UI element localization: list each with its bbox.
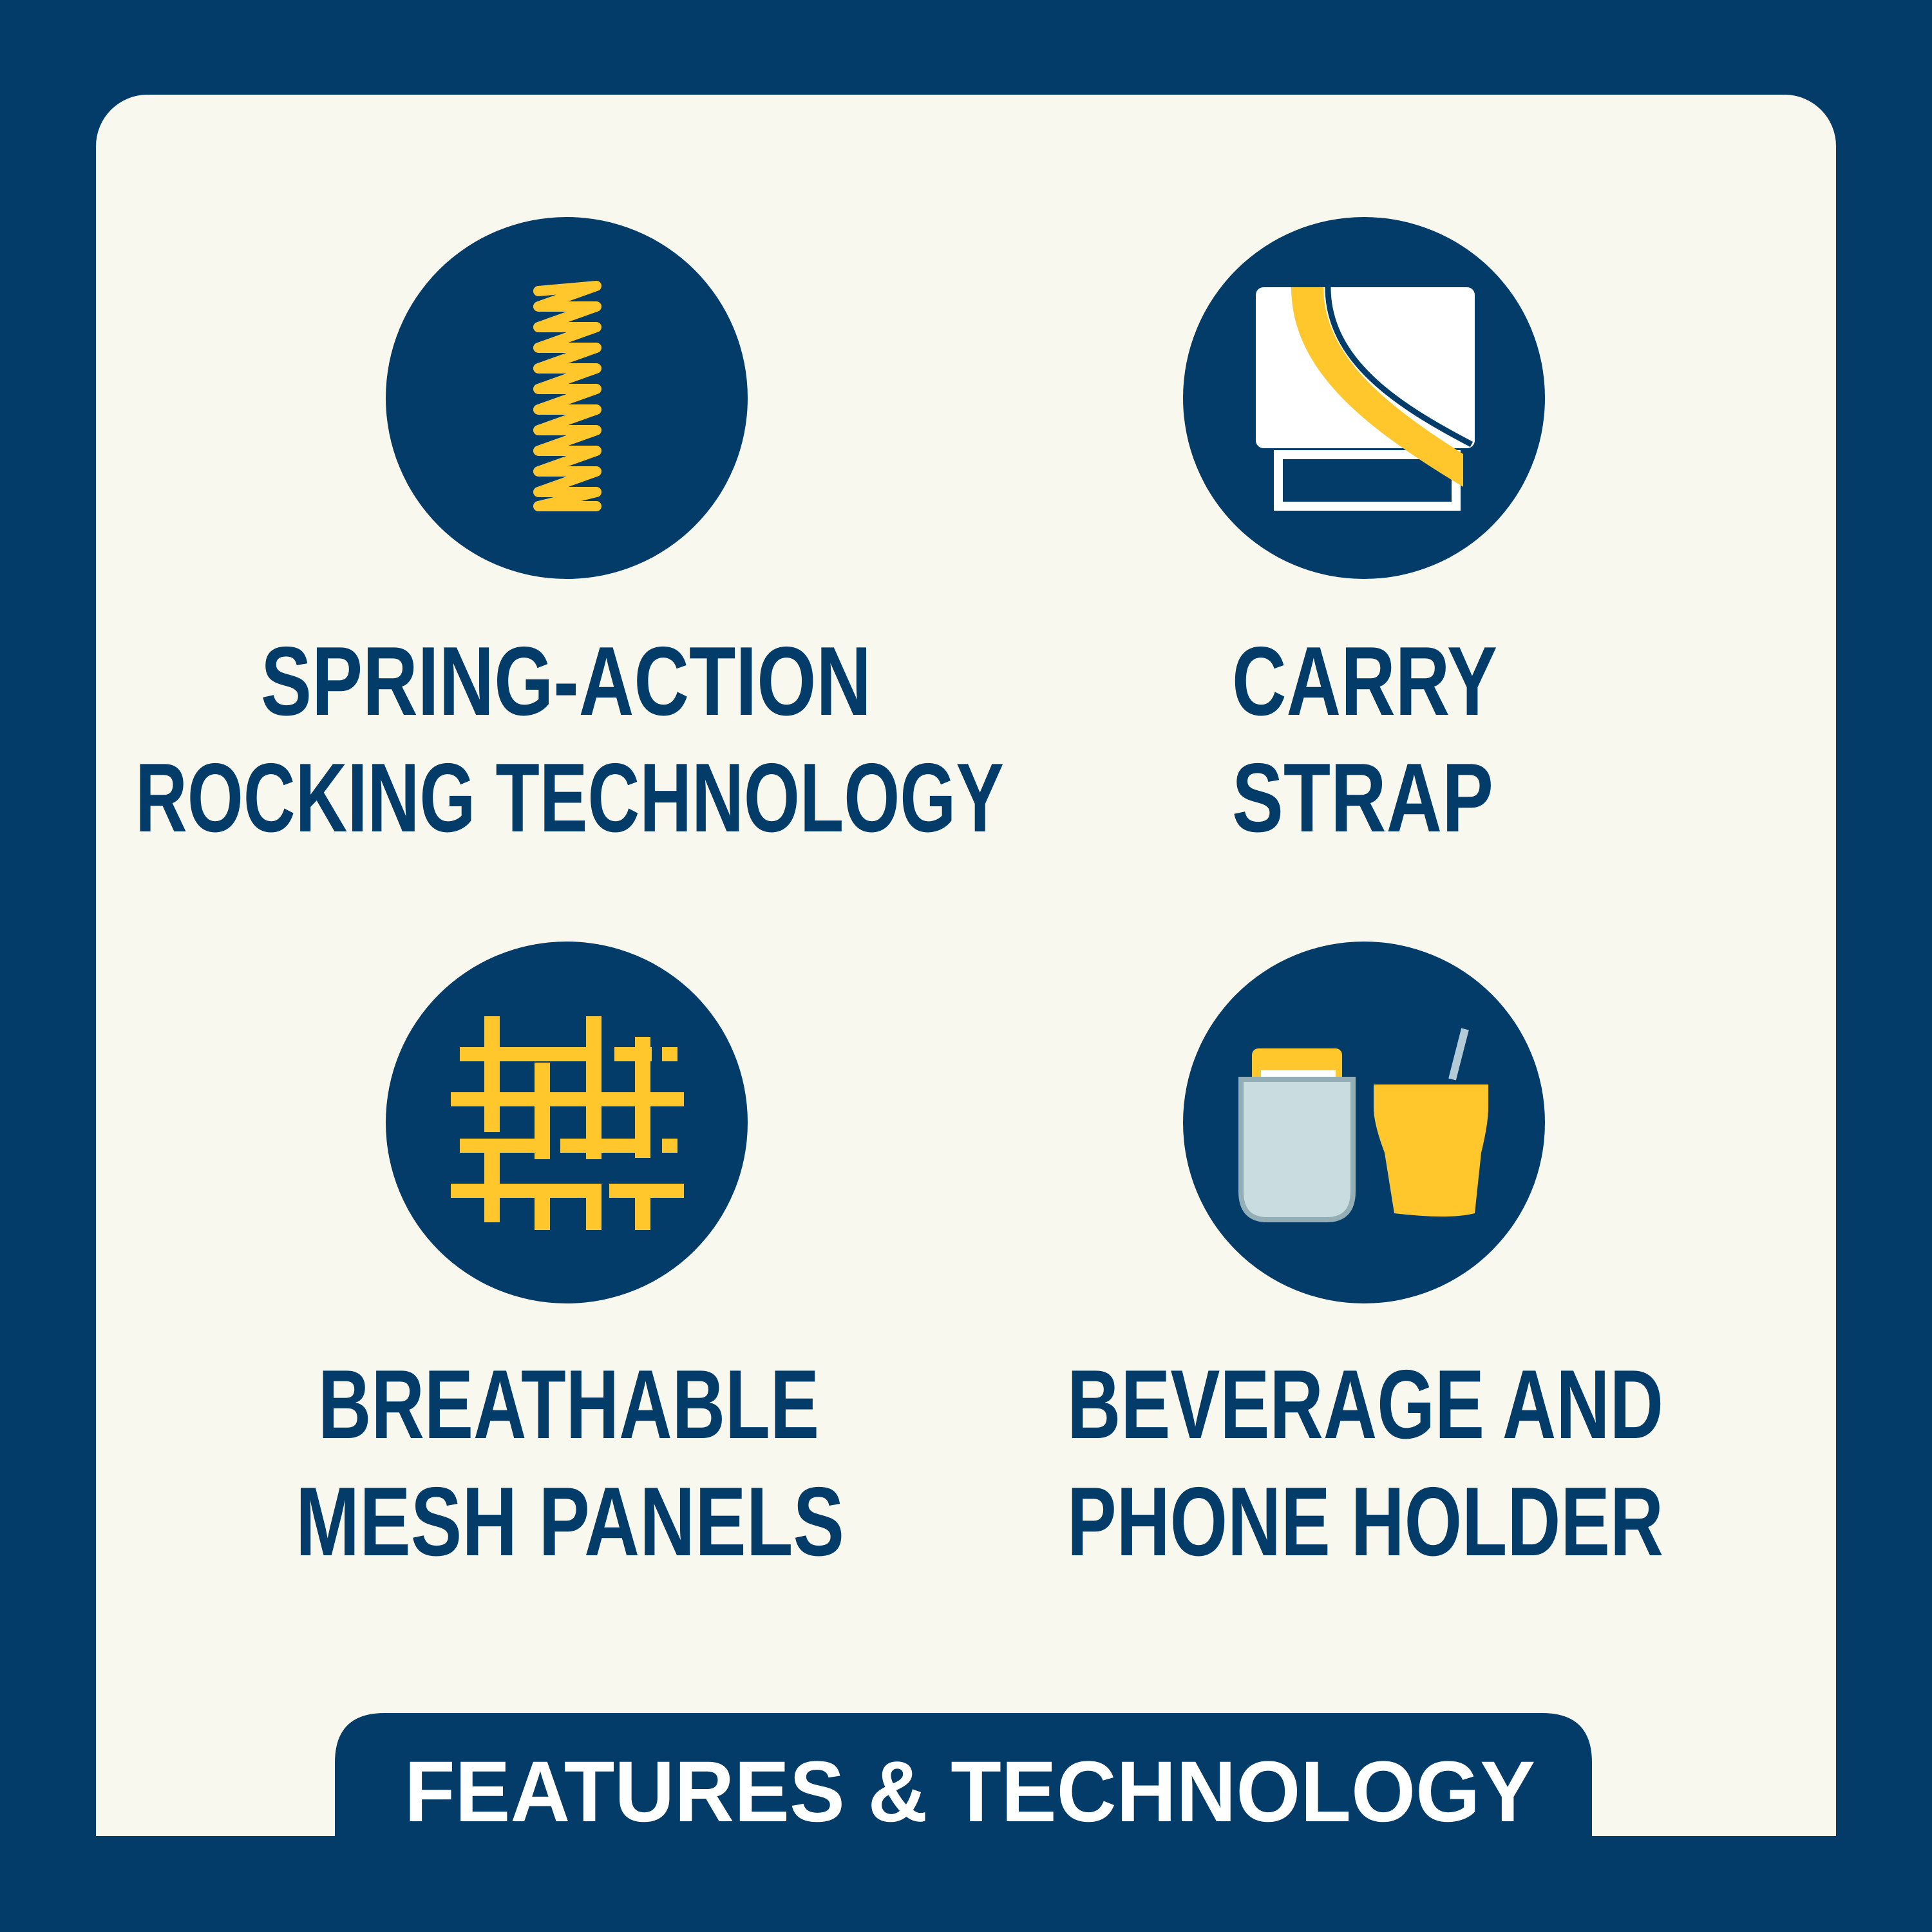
icon: mesh grid [386, 942, 748, 1303]
heading: carry strap: STRAP [1232, 743, 1493, 853]
heading: carry strap [1232, 627, 1497, 853]
heading: breathable mesh panels: MESH PANELS [296, 1467, 844, 1577]
icon: phone pocket and cup [1183, 942, 1545, 1303]
title tab: features & technology [335, 1713, 1592, 1932]
feature: spring-action [135, 217, 1004, 853]
heading: breathable mesh panels: BREATHABLE [318, 1350, 819, 1459]
icon: spring [386, 217, 748, 579]
heading: carry strap: CARRY [1232, 627, 1497, 736]
feature: beverage and phone holder [1067, 942, 1663, 1577]
heading: spring-action rocking technology [135, 627, 1004, 853]
icon: chair with strap [1183, 217, 1545, 579]
heading: spring-action rocking technology: SPRING-ACTION [261, 627, 871, 736]
heading: spring-action rocking technology: ROCKING TECHNOLOGY [135, 743, 1004, 853]
heading: breathable mesh panels [296, 1350, 844, 1577]
heading: beverage and phone holder: BEVERAGE AND [1067, 1350, 1663, 1459]
heading: beverage and phone holder [1067, 1350, 1663, 1577]
heading: beverage and phone holder: PHONE HOLDER [1067, 1467, 1663, 1577]
feature: breathable mesh [296, 942, 844, 1577]
feature: carry strap [1183, 217, 1545, 853]
title tab: features & technology: FEATURES & TECHNOLOGY [404, 1744, 1535, 1840]
